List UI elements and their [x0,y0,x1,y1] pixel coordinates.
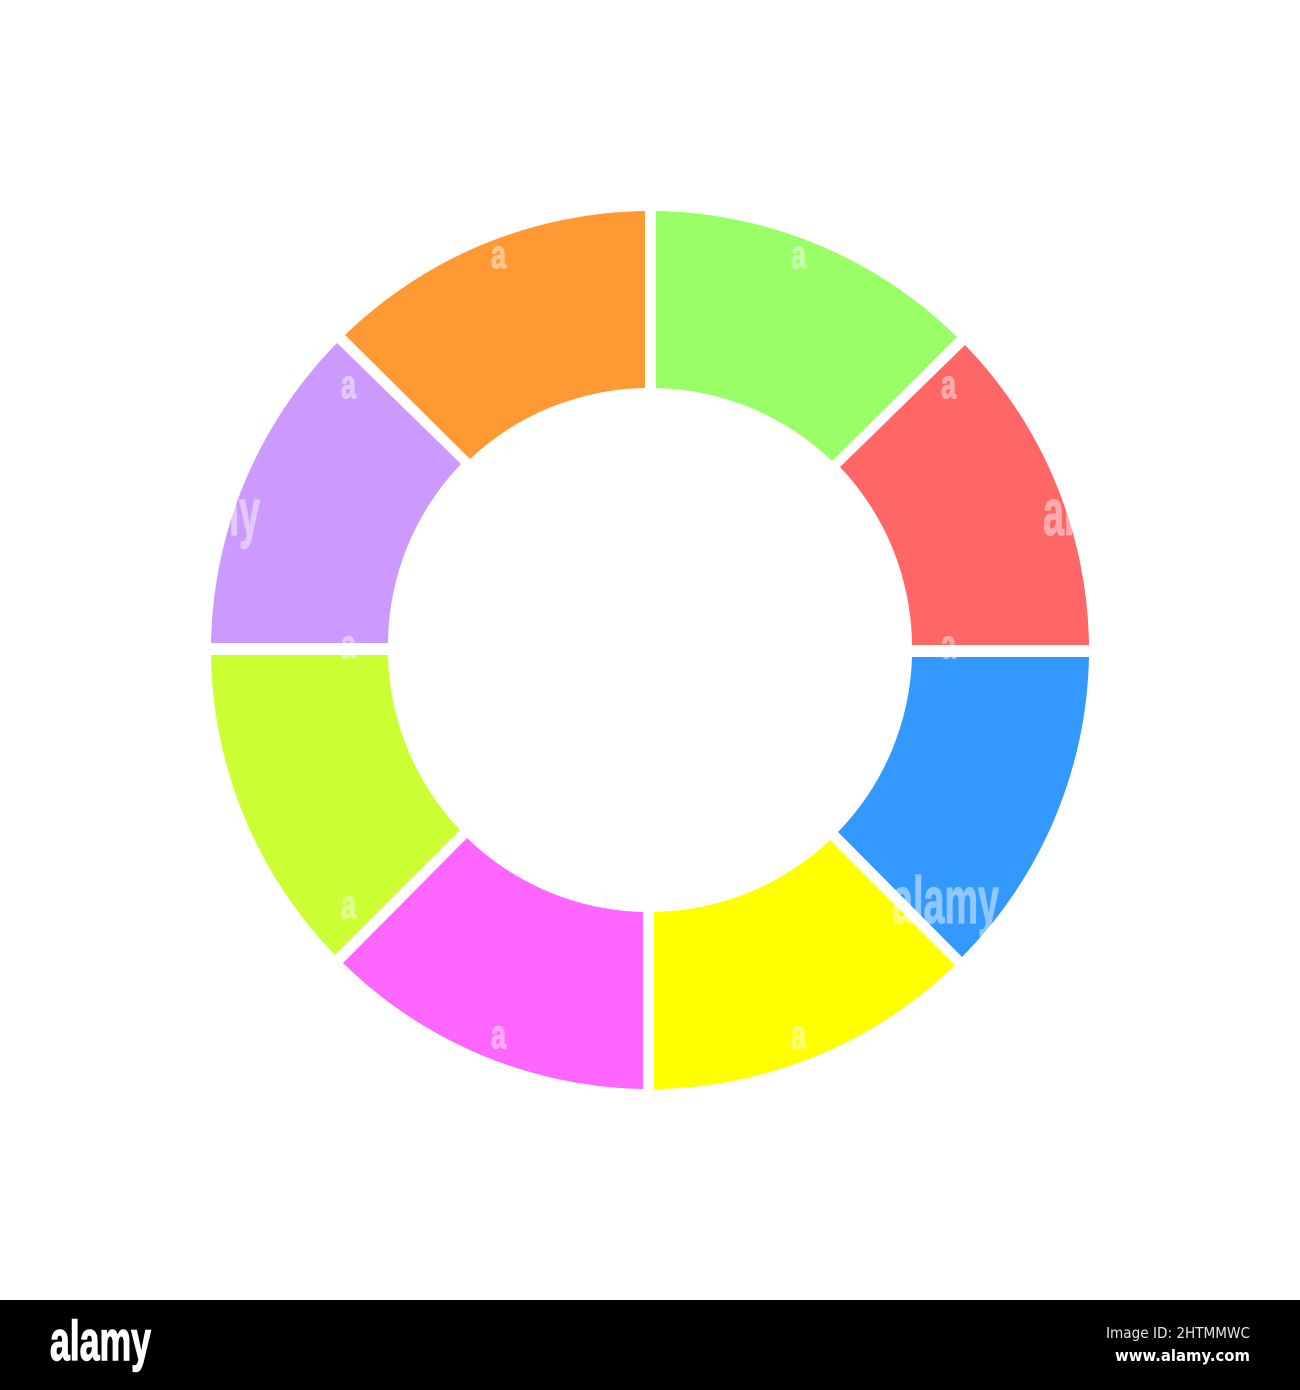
watermark text: a [941,363,957,407]
watermark text: a [491,1013,507,1057]
segment: blue [838,657,1089,957]
watermark text: alamy [153,475,260,549]
watermark text: alamy [1043,475,1150,549]
footer bar [0,1300,1300,1390]
segment: purple [211,343,461,643]
watermark text: alamy [892,863,999,937]
segment: lime [211,655,460,955]
segment: red [840,345,1089,645]
segment: orange [345,211,645,459]
footer logo: alamy [50,1309,151,1372]
segment: magenta [343,838,643,1089]
watermark text: a [341,883,357,927]
segment: yellow [654,840,955,1089]
watermark text: a [341,623,357,667]
watermark text [153,233,1150,1057]
segment: green [656,211,957,461]
watermark text: a [791,1013,807,1057]
watermark text: a [491,233,507,277]
image id: Image ID: 2HTMMWC [1106,1324,1250,1342]
watermark text: a [791,233,807,277]
website: www.alamy.com [1115,1346,1250,1365]
watermark text: a [941,623,957,667]
watermark text: a [341,363,357,407]
donut chart [211,211,1089,1089]
